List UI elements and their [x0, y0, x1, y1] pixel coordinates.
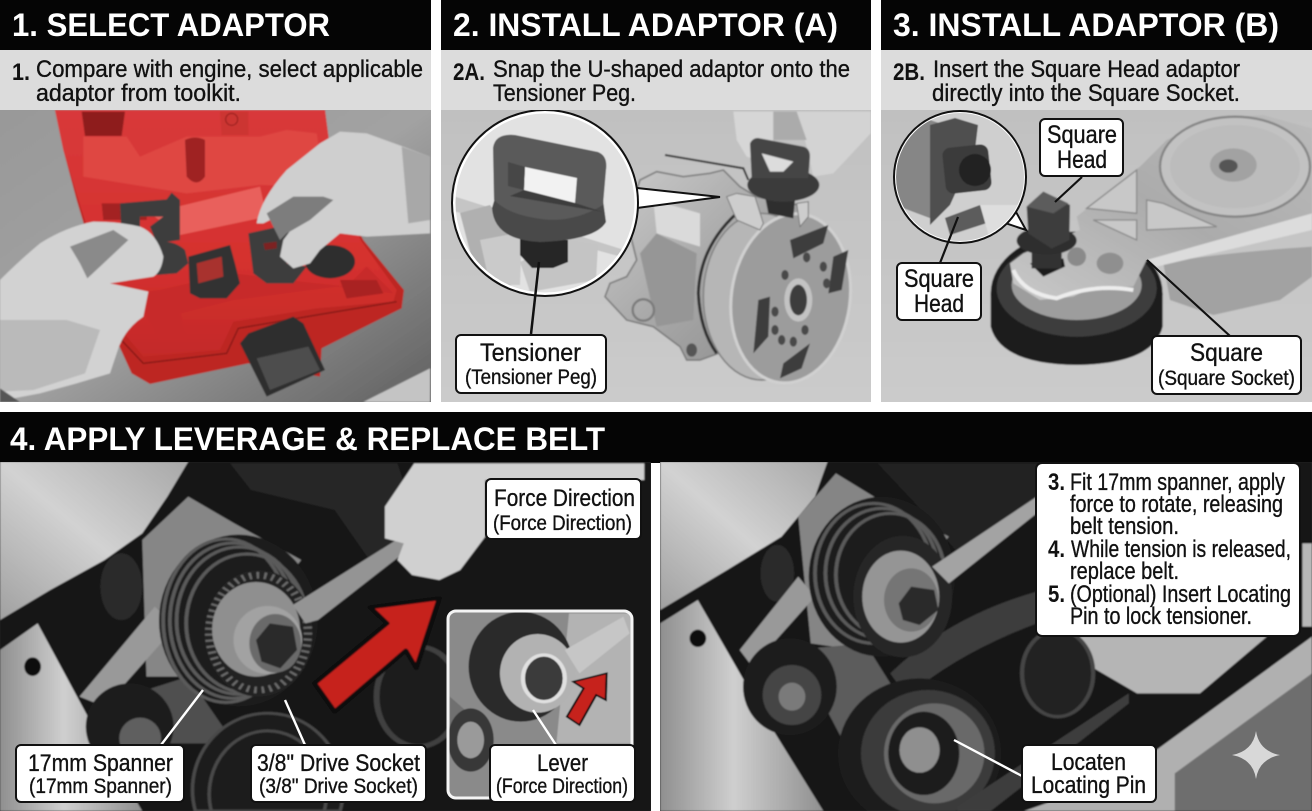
- illustration: square head adaptor on tensioner pulley arm: [875, 104, 1312, 408]
- callout: Locating Pin: Locaten: [1051, 749, 1126, 776]
- leader line: locating pin: [954, 740, 1022, 776]
- callout: Square Head left: Square: [904, 265, 974, 293]
- callout: Tensioner: (Tensioner Peg): [465, 366, 597, 389]
- callout: Square socket: (Square Socket): [1158, 367, 1295, 390]
- heading: step 4: 4. APPLY LEVERAGE & REPLACE BELT: [10, 421, 605, 457]
- text block: step 2B instruction: Insert the Square Head adaptor: [933, 56, 1240, 83]
- text block: steps 3 to 5: Pin to lock tensioner.: [1070, 603, 1252, 630]
- icon: sparkle watermark: [1232, 731, 1280, 779]
- text block: steps 3 to 5: 5.: [1048, 581, 1065, 608]
- text block: step 2A instruction: Tensioner Peg.: [493, 80, 636, 107]
- photo: spanner released with belt replaced: [660, 462, 1312, 811]
- leader line: tensioner: [531, 262, 539, 334]
- arrow: magnifier pointer to tensioner peg: [637, 188, 720, 208]
- illustration: aluminium tensioner with adaptor held by gloved fingers: [435, 104, 877, 408]
- heading: step 1: 1. SELECT ADAPTOR: [12, 7, 330, 43]
- callout: Force Direction: [486, 479, 641, 539]
- callout: 3/8 Drive Socket: 3/8" Drive Socket: [257, 750, 420, 777]
- panel: step 4 apply leverage and replace belt: [0, 412, 1312, 811]
- text block: steps 3 to 5: belt tension.: [1070, 513, 1179, 540]
- leader lines: spanner, socket, lever: [161, 690, 556, 745]
- arrow: magnifier pointer: [1005, 212, 1026, 230]
- leader lines: square head and socket: [940, 177, 1230, 336]
- callout: Square Head top: Square: [1047, 121, 1117, 149]
- text block: steps 3 to 5: 4.: [1048, 536, 1065, 563]
- magnifier: adaptor close-up: [450, 110, 640, 300]
- text block: steps 3 to 5: [1036, 463, 1300, 636]
- panel: step 3 install adaptor B: [875, 0, 1312, 408]
- text block: steps 3 to 5: 3.: [1048, 469, 1065, 496]
- text block: step 2A instruction: [441, 50, 871, 110]
- callout: Locating Pin: Locating Pin: [1031, 772, 1146, 799]
- text block: step 1 instruction: adaptor from toolkit.: [36, 80, 241, 107]
- callout: Square Head left: Head: [914, 290, 964, 318]
- text block: step 1 instruction: 1.: [12, 59, 30, 86]
- inset: lever close-up with small arrow: [448, 610, 636, 800]
- heading: step 2: [441, 0, 871, 50]
- text block: steps 3 to 5: replace belt.: [1070, 558, 1179, 585]
- callout: 17mm Spanner: [16, 745, 184, 802]
- callout: Locating Pin: [1022, 745, 1156, 802]
- panel: step 1 select adaptor: [0, 0, 437, 408]
- heading: step 2: 2. INSTALL ADAPTOR (A): [453, 7, 838, 43]
- heading: step 3: 3. INSTALL ADAPTOR (B): [893, 7, 1279, 43]
- callout: Force Direction: Force Direction: [494, 485, 635, 512]
- heading: step 1: [0, 0, 431, 50]
- heading: step 3: [881, 0, 1312, 50]
- text block: step 2B instruction: 2B.: [893, 59, 925, 86]
- text block: step 2A instruction: Snap the U-shaped adaptor onto the: [493, 56, 850, 83]
- callout: Square Head top: Head: [1057, 146, 1107, 174]
- callout: 17mm Spanner: 17mm Spanner: [28, 750, 173, 777]
- heading: step 4: [0, 412, 1312, 463]
- callout: Square Head left: [897, 263, 981, 320]
- magnifier: square socket close-up: [894, 111, 1026, 243]
- callout: Lever: [490, 745, 635, 802]
- callout: Lever: (Force Direction): [496, 775, 628, 798]
- callout: Lever: Lever: [537, 750, 588, 777]
- callout: Square socket: [1152, 336, 1301, 394]
- callout: Force Direction: (Force Direction): [493, 512, 632, 535]
- callout: 17mm Spanner: (17mm Spanner): [29, 775, 172, 798]
- text block: step 2B instruction: [881, 50, 1312, 110]
- text block: step 2A instruction: 2A.: [453, 59, 485, 86]
- callout: Square Head top: [1040, 119, 1123, 176]
- callout: 3/8 Drive Socket: [251, 745, 426, 802]
- text block: step 1 instruction: Compare with engine, select applicable: [36, 56, 423, 83]
- illustration: gloved hands holding adaptors over red toolkit case: [0, 104, 437, 408]
- text block: step 1 instruction: [0, 50, 431, 110]
- photo: spanner on tensioner pulley with force arrow: [0, 462, 651, 811]
- callout: Tensioner: [456, 335, 606, 393]
- callout: Tensioner: Tensioner: [480, 339, 581, 367]
- panel: step 2 install adaptor A: [435, 0, 877, 408]
- callout: 3/8 Drive Socket: (3/8" Drive Socket): [259, 775, 418, 798]
- text block: step 2B instruction: directly into the Square Socket.: [932, 80, 1240, 107]
- callout: Square socket: Square: [1190, 339, 1263, 367]
